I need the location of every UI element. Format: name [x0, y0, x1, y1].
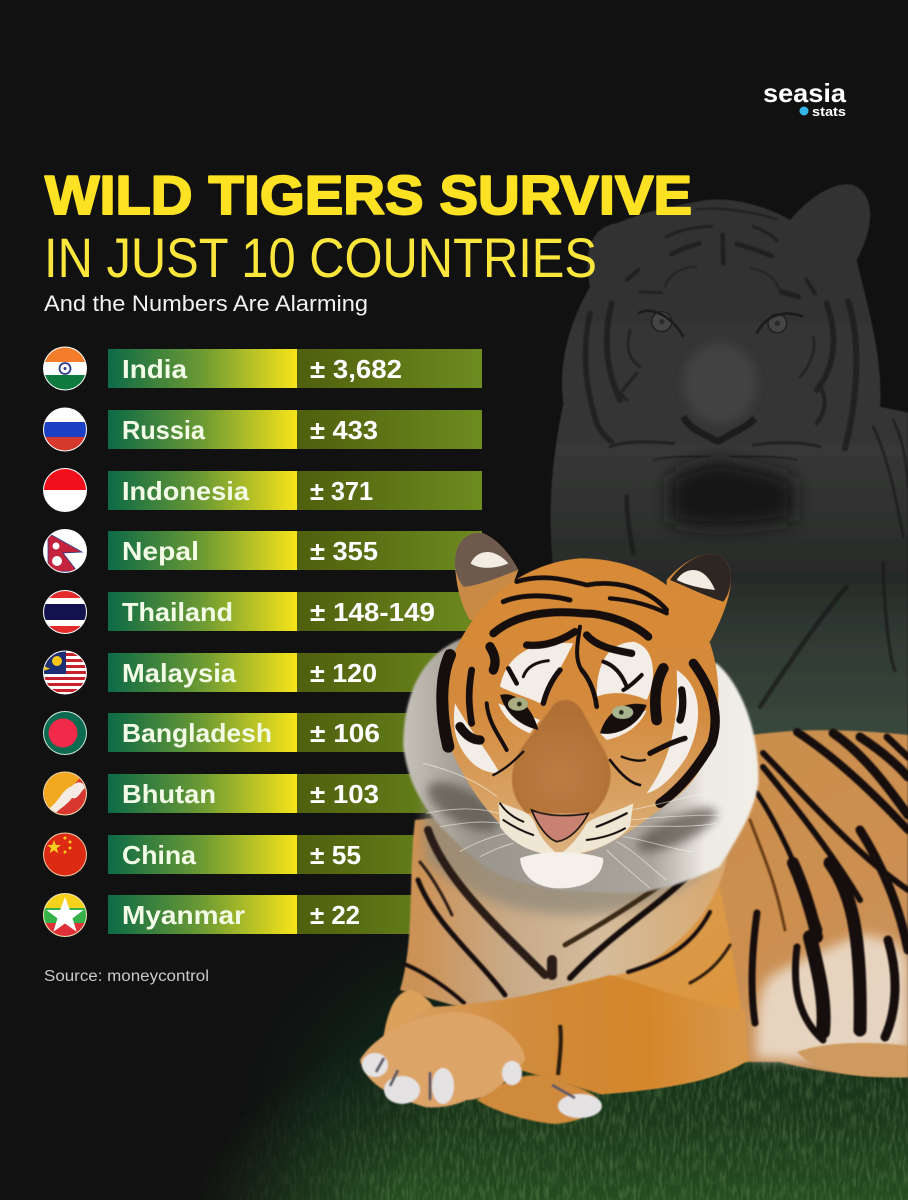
ghost eyes [638, 311, 803, 337]
rear body [700, 730, 908, 1077]
logo: seasia stats: stats [812, 104, 846, 119]
flag: Malaysia [43, 650, 87, 694]
flag: Nepal [43, 529, 87, 573]
row: Myanmar [43, 893, 412, 937]
nose [532, 810, 588, 842]
tiger head, drawn in 3x space [403, 533, 758, 893]
logo: seasia stats [763, 78, 847, 119]
flag: Thailand [43, 590, 87, 634]
row: China: ± 55 [310, 840, 361, 870]
row: Bhutan: Bhutan [122, 779, 216, 809]
row: India: ± 3,682 [310, 354, 402, 384]
row: Bangladesh [43, 711, 482, 755]
white facial patches [454, 642, 698, 793]
left ear [455, 533, 518, 620]
face [443, 558, 718, 857]
source note: Source: moneycontrol [44, 968, 209, 985]
eyes [500, 694, 647, 734]
nose bridge [512, 700, 611, 813]
row: Malaysia: Malaysia [122, 658, 237, 688]
flag: Bhutan [43, 772, 87, 816]
ghost stripes [585, 209, 908, 707]
title: IN JUST 10 COUNTRIES [44, 226, 597, 289]
subtitle: And the Numbers Are Alarming [44, 291, 368, 316]
row: Bhutan [43, 772, 430, 816]
flag: India [43, 346, 87, 390]
title: WILD TIGERS SURVIVE [45, 164, 692, 226]
chest stripes [404, 830, 730, 1005]
flag: Indonesia [43, 468, 87, 512]
row: Indonesia: Indonesia [122, 476, 250, 506]
grass [216, 1062, 908, 1200]
right ear [667, 554, 731, 642]
shoulder [560, 880, 748, 1094]
row: Thailand [40, 590, 482, 636]
foreground tiger [360, 533, 908, 1124]
tiger paws [360, 1012, 602, 1124]
ghost tiger image [551, 184, 908, 737]
whiskers [423, 763, 723, 888]
row: China [43, 832, 482, 876]
row: Russia: ± 433 [310, 415, 378, 445]
row: India: India [122, 354, 188, 384]
row: Malaysia: ± 120 [310, 658, 377, 688]
rear body stripes [750, 732, 908, 1040]
white belly [756, 935, 908, 1060]
row: Russia: Russia [122, 415, 206, 445]
flag: Bangladesh [43, 711, 87, 755]
flag: Russia [43, 408, 87, 452]
ghost nose and mouth [670, 417, 793, 528]
ghost bridge fur [683, 343, 757, 423]
row: Myanmar: ± 22 [310, 900, 360, 930]
logo: seasia stats: seasia [763, 78, 847, 108]
row: Myanmar: Myanmar [122, 900, 245, 930]
rear paw [797, 1043, 908, 1077]
row: Bangladesh: Bangladesh [122, 718, 272, 748]
row: Malaysia [43, 650, 440, 694]
chest [400, 800, 730, 1010]
row: Nepal: Nepal [122, 536, 199, 566]
ruff [403, 637, 758, 893]
row: Bhutan: ± 103 [310, 779, 379, 809]
row: Thailand: ± 148-149 [310, 597, 435, 627]
row: Indonesia [40, 468, 482, 512]
elbow [383, 990, 436, 1040]
row: China: China [122, 840, 197, 870]
row: Indonesia: ± 371 [310, 476, 373, 506]
flag: China [43, 832, 87, 876]
lower ruff dark fur [420, 772, 722, 860]
row: India [40, 346, 482, 391]
muzzle [498, 802, 633, 888]
row: Nepal [43, 529, 482, 573]
flag: Myanmar [43, 893, 87, 937]
facial stripes [442, 578, 715, 840]
ruff lower blend [425, 800, 725, 915]
row: Nepal: ± 355 [310, 536, 378, 566]
title [44, 164, 692, 289]
row: Russia [40, 408, 482, 452]
front leg [380, 975, 748, 1094]
row: Thailand: Thailand [122, 597, 233, 627]
row: Bangladesh: ± 106 [310, 718, 380, 748]
